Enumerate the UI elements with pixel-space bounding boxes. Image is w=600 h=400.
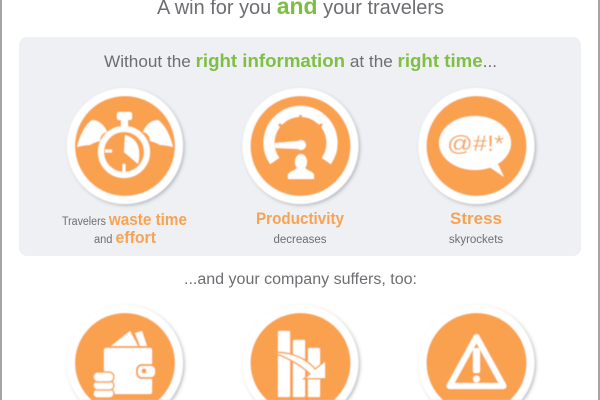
icon: falling bar chart (243, 305, 359, 400)
icon: speech bubble (418, 88, 534, 204)
subheading: ...and your company suffers, too: (184, 271, 417, 288)
icon: warning triangle (418, 305, 534, 400)
panel heading: Without the right information at the right time... (104, 50, 497, 71)
label: productivity: Productivity (256, 209, 344, 228)
label: decreases: decreases (273, 234, 327, 246)
panel: without the right information (19, 37, 581, 256)
icon: wallet and coins (67, 305, 183, 400)
icon: winged stopwatch (67, 88, 183, 204)
label: stress: Stress (450, 209, 502, 228)
icon: speech bubble: @#!* (447, 131, 504, 156)
label: waste time: Travelers waste time (62, 211, 187, 229)
label: and effort: and effort (94, 229, 156, 247)
icon: speed gauge with person (242, 88, 358, 204)
label: skyrockets: skyrockets (449, 234, 503, 246)
